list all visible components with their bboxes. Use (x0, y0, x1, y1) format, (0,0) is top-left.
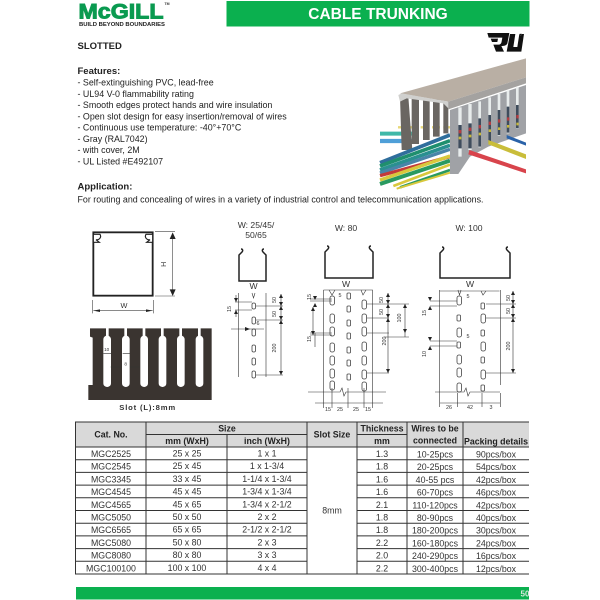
table header text: Thickness (360, 424, 404, 434)
slot drawing W 80: 200 (382, 336, 388, 346)
table rows: 10-25pcs (417, 450, 454, 460)
slot drawing W 80: 15 (307, 294, 313, 300)
table rows: 12pcs/box (476, 564, 517, 574)
table rows: 42pcs/box (476, 500, 517, 510)
table rows: 50 x 80 (173, 537, 202, 547)
slot drawing W 100: 42 (467, 405, 473, 411)
slot drawing W 25/45/50/65 (227, 293, 283, 378)
table rows: 40pcs/box (476, 513, 517, 523)
trunking cross-section diagram: H (161, 262, 168, 267)
table rows: 1-3/4 x 1-3/4 (242, 487, 292, 497)
table grid (75, 422, 529, 574)
table header text: inch (WxH) (244, 436, 290, 446)
table rows: 80-90pcs (417, 513, 454, 523)
slot drawing W 25/45/50/65: 50 (272, 311, 278, 317)
table rows: MGC2545 (91, 462, 131, 472)
footer bar with page number: 50 (520, 590, 530, 598)
table rows: MGC3345 (91, 474, 131, 484)
features text: - with cover, 2M (78, 145, 140, 155)
features text: - Continuous use temperature: -40°+70°C (78, 122, 242, 132)
table rows: 24pcs/box (476, 538, 517, 548)
merged slot size cell: 8mm (322, 506, 342, 516)
table rows: 1.8 (376, 525, 388, 535)
table rows: 1-1/4 x 1-3/4 (242, 474, 292, 484)
slot comb diagram: 10 (104, 347, 110, 352)
features text: - Smooth edges protect hands and wire insulation (78, 100, 272, 110)
table rows: 54pcs/box (476, 462, 517, 472)
profile W 80 (325, 223, 373, 289)
slot drawing W 25/45/50/65: 15 (227, 306, 233, 312)
slot drawing W 25/45/50/65: 200 (272, 344, 278, 352)
slot drawing W 80: 25 (353, 407, 359, 413)
footer bar with page number (76, 587, 530, 600)
table rows: 2.0 (376, 551, 388, 561)
table rows: 60-70pcs (417, 488, 454, 498)
table rows: 110-120pcs (412, 500, 458, 510)
slot drawing W 100 (422, 290, 516, 411)
profile W 25/45/50/65: W: 25/45/ (238, 220, 275, 230)
table rows: 45 x 45 (173, 487, 202, 497)
table header text: Cat. No. (94, 430, 128, 440)
table rows: 2.2 (376, 563, 388, 573)
table header background (75, 422, 529, 447)
table rows: 25 x 25 (173, 448, 202, 458)
slot comb diagram (88, 327, 212, 412)
slot drawing W 100: 10 (422, 351, 428, 357)
table rows: 25 x 45 (173, 461, 202, 471)
profile W 25/45/50/65: W (249, 281, 258, 291)
table rows: 30pcs/box (476, 526, 517, 536)
slot drawing W 80: 25 (337, 407, 343, 413)
table rows: 50 x 50 (173, 512, 202, 522)
table rows: MGC4565 (91, 500, 131, 510)
table header text: Wires to be (411, 424, 459, 434)
table rows: 1.6 (376, 487, 388, 497)
table rows: 45 x 65 (173, 499, 202, 509)
profile W 100 (440, 223, 510, 289)
table rows: MGC5050 (91, 512, 131, 522)
table header text: connected (413, 436, 457, 446)
table rows: 40-55 pcs (416, 475, 455, 485)
profile W 100: W (466, 279, 475, 289)
logo: McGILL (78, 0, 164, 24)
features text: - UL Listed #E492107 (78, 156, 163, 166)
application text: Application: (78, 182, 132, 192)
specification table (75, 422, 529, 574)
profile W 80: W: 80 (335, 223, 357, 233)
slot drawing W 100: 200 (506, 342, 512, 350)
features text: Features: (78, 66, 120, 77)
table rows: MGC5080 (91, 538, 131, 548)
table rows: 100 x 100 (168, 563, 206, 573)
slot drawing W 100: 5 (466, 294, 470, 300)
table rows: 1.8 (376, 512, 388, 522)
slot drawing W 80: 15 (307, 336, 313, 342)
features text: - UL94 V-0 flammability rating (78, 89, 194, 99)
table rows: 4 x 4 (257, 563, 277, 573)
slot drawing W 80: 15 (365, 407, 371, 413)
slot drawing W 80: 5 (338, 293, 342, 299)
profile W 80: W (342, 279, 351, 289)
table rows: 3 x 3 (257, 550, 277, 560)
table rows: 2-1/2 x 2-1/2 (242, 525, 292, 535)
table rows: MGC8080 (91, 551, 131, 561)
table header text (94, 424, 528, 446)
slot comb diagram: 8 (124, 362, 127, 367)
profile W 25/45/50/65: 50/65 (245, 230, 267, 240)
slot drawing W 80: 100 (397, 314, 403, 322)
UL mark (487, 33, 524, 52)
table rows: 1 x 1-3/4 (250, 461, 284, 471)
table rows: 46pcs/box (476, 488, 517, 498)
table rows: 240-290pcs (412, 551, 459, 561)
table rows: MGC6565 (91, 525, 131, 535)
table rows: 1 x 1 (257, 448, 277, 458)
logo: TM (164, 2, 170, 6)
table rows: MGC100100 (86, 563, 136, 573)
slot drawing W 80: 50 (379, 309, 385, 315)
table rows: 42pcs/box (476, 475, 517, 485)
table rows: 80 x 80 (173, 550, 202, 560)
table rows: 2 x 2 (257, 512, 277, 522)
slot drawing W 80: 15 (325, 407, 331, 413)
table header text: mm (WxH) (165, 436, 209, 446)
table rows: 2.1 (376, 500, 388, 510)
features text: - Gray (RAL7042) (78, 134, 148, 144)
slot drawing W 80 (307, 290, 409, 413)
table rows: 20-25pcs (417, 462, 454, 472)
table rows: 1.8 (376, 462, 388, 472)
profile W 25/45/50/65 (238, 220, 275, 291)
slot drawing W 80: 50 (379, 297, 385, 303)
slot drawing W 25/45/50/65: 50 (272, 297, 278, 303)
features text (78, 66, 287, 166)
table rows: 180-200pcs (412, 526, 459, 536)
profile W 100: W: 100 (455, 223, 483, 233)
table rows: 160-180pcs (412, 538, 459, 548)
table rows: 1.3 (376, 449, 388, 459)
slot drawing W 100: 26 (446, 405, 452, 411)
logo: BUILD BEYOND BOUNDARIES (79, 22, 166, 28)
title banner (226, 1, 530, 26)
table rows: MGC4545 (91, 487, 131, 497)
product photo: slotted trunking with coloured wires (380, 58, 526, 189)
table rows (86, 448, 517, 574)
table header text: Size (218, 424, 236, 434)
application text (78, 182, 484, 204)
table rows: 2 x 3 (257, 537, 277, 547)
table header text: Slot Size (314, 430, 350, 440)
table rows: 1.6 (376, 474, 388, 484)
table rows: 300-400pcs (412, 564, 459, 574)
table rows: 90pcs/box (476, 450, 517, 460)
subtitle: SLOTTED (78, 41, 122, 52)
table header text: Packing details (464, 436, 528, 446)
application text: For routing and concealing of wires in a variety of industrial control and telecommunication applications. (78, 194, 484, 204)
slot drawing W 100: 50 (506, 295, 512, 301)
table header text: mm (374, 436, 390, 446)
slot drawing W 100: 50 (506, 308, 512, 314)
slot drawing W 100: 5 (466, 334, 470, 340)
table rows: MGC2525 (91, 449, 131, 459)
slot drawing W 100: 3 (490, 405, 492, 411)
slot comb diagram: Slot (L):8mm (119, 403, 176, 412)
features text: - Self-extinguishing PVC, lead-free (78, 78, 214, 88)
table rows: 16pcs/box (476, 551, 517, 561)
table rows: 1-3/4 x 2-1/2 (242, 499, 292, 509)
title banner: CABLE TRUNKING (308, 6, 448, 23)
trunking cross-section diagram: W (121, 301, 128, 310)
slot drawing W 25/45/50/65: 6 (256, 321, 260, 327)
table rows: 2.2 (376, 538, 388, 548)
slot drawing W 100: 15 (422, 310, 428, 316)
table rows: 65 x 65 (173, 525, 202, 535)
features text: - Open slot design for easy insertion/removal of wires (78, 111, 287, 121)
table rows: 33 x 45 (173, 474, 202, 484)
trunking cross-section diagram (92, 232, 176, 313)
